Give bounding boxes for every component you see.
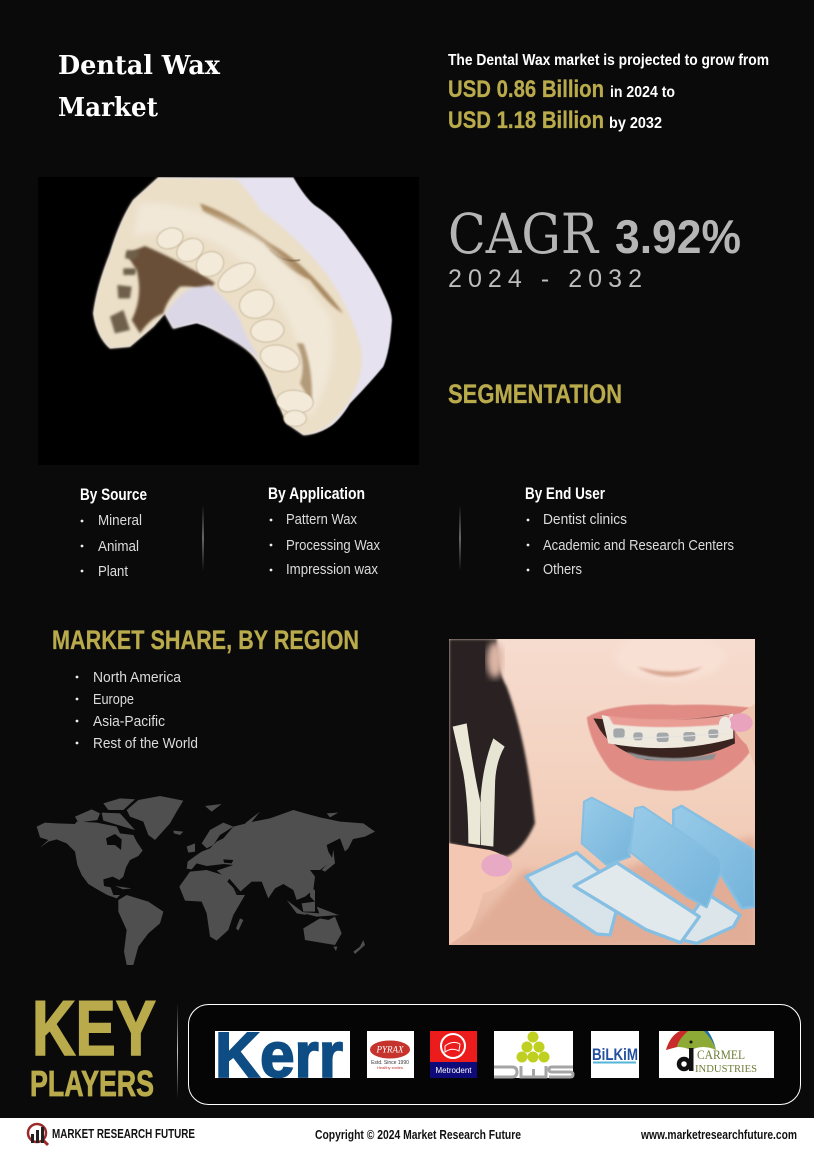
CAGR [448,202,741,293]
market projection text: by 2032 [609,115,662,132]
footer logo [28,1124,48,1145]
CAGR: 3.92% [615,210,741,263]
footer: MARKET RESEARCH FUTURE [52,1126,195,1141]
logo: Kerr: Kerr [215,1019,343,1091]
cream gum layer [93,177,362,435]
title: Market [58,93,158,123]
photo: dental plaster cast [38,177,419,465]
heading: key players: KEY [32,984,156,1072]
CAGR: 2024 - 2032 [448,265,642,293]
world map [37,796,375,965]
segment: by application: Processing Wax [286,537,380,554]
logo: Bilkim [591,1031,639,1078]
region list: Europe [93,691,134,708]
segment: by end user: By End User [525,484,605,503]
segment: by end user: Dentist clinics [543,511,627,528]
wax strips [453,723,481,845]
footer: Copyright © 2024 Market Research Future [315,1127,521,1142]
logo: Metrodent: Metrodent [435,1066,472,1075]
segment: by application: Pattern Wax [286,511,357,528]
region list: North America [93,669,182,686]
segment: by end user [525,484,734,578]
logo: DWS [494,1031,573,1078]
blue wax cases [526,798,755,943]
segment: by source: Animal [98,538,139,555]
heading: segmentation: SEGMENTATION [448,379,622,409]
title: Dental Wax [58,51,220,81]
logo: Bilkim: BiLKiM [592,1045,638,1064]
logo: Pyrax [367,1031,414,1078]
segment: by end user: Academic and Research Centers [543,537,734,554]
photo: woman with braces and dental wax [449,632,755,945]
logo: Carmel Industries: INDUSTRIES [695,1063,757,1075]
title [58,51,220,123]
logo: Pyrax: Healthy smiles [377,1065,403,1070]
market projection text: USD 1.18 Billion [448,107,604,134]
market projection text: in 2024 to [610,84,675,101]
market projection text: The Dental Wax market is projected to grow from [448,52,769,69]
heading: key players: PLAYERS [30,1063,154,1104]
segment: by source [80,485,147,580]
segment: by source: Plant [98,563,129,580]
segment: by application [268,484,380,578]
segment: by source: By Source [80,485,147,504]
region list [76,669,198,752]
footer [0,1118,814,1150]
palate [127,246,215,333]
teeth with braces [602,713,733,748]
teeth [154,224,314,426]
segment: by application: Impression wax [286,561,378,578]
logo: Pyrax: Estd. Since 1990 [371,1060,409,1066]
market projection text [448,52,769,134]
CAGR: CAGR [448,202,599,266]
segment: by source: Mineral [98,512,142,529]
logo: Carmel Industries: CARMEL [697,1048,745,1062]
heading: key players [30,984,156,1104]
key players panel [188,1004,800,1104]
lips [587,704,755,791]
heading: market share by region: MARKET SHARE, BY REGION [52,625,359,655]
segment: by application: By Application [268,484,365,503]
logo: Pyrax: PYRAX [376,1044,404,1054]
logo: Carmel Industries [659,1031,774,1078]
market projection text: USD 0.86 Billion [448,76,604,103]
plaster base [93,177,392,435]
logo: Metrodent [430,1031,477,1078]
region list: Rest of the World [93,735,198,752]
fingers [735,704,755,766]
segment: by end user: Others [543,561,582,578]
region list: Asia-Pacific [93,713,165,730]
